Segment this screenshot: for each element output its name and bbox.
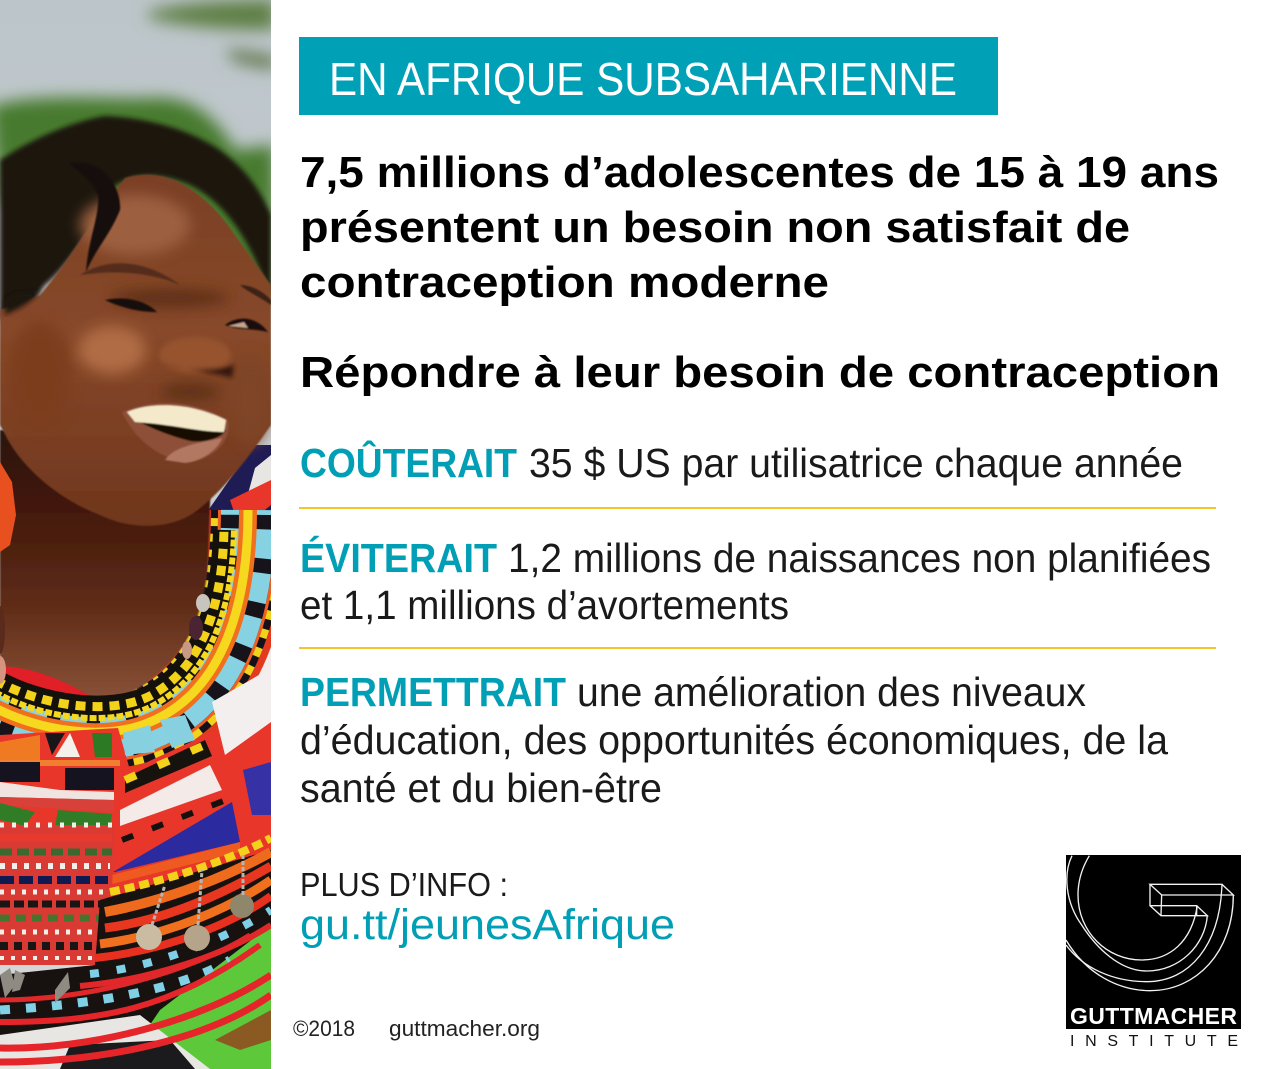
neck xyxy=(0,430,212,701)
text block: benefits: d’éducation, des opportunités économiques, de la xyxy=(300,717,1168,763)
banner: region label xyxy=(299,37,998,115)
red garment xyxy=(6,666,89,696)
more info link: PLUS D’INFO : xyxy=(300,866,508,903)
photo: smiling woman with beaded necklace xyxy=(0,0,275,1069)
subheading: Répondre à leur besoin de contraception xyxy=(300,348,1220,397)
text block: cost: COÛTERAIT xyxy=(300,440,517,486)
face xyxy=(0,175,271,526)
front collar xyxy=(0,668,271,900)
eyes and brows xyxy=(80,263,271,332)
text block: benefits xyxy=(300,669,1168,811)
footer: copyright and site xyxy=(293,1016,540,1041)
nose xyxy=(159,337,234,378)
heading: unmet need statistic: contraception moderne xyxy=(300,258,829,307)
necklace rings xyxy=(0,420,271,732)
left edge beads xyxy=(0,462,16,552)
heading: unmet need statistic: présentent un besoin non satisfait de xyxy=(300,203,1130,252)
text block: births and abortions averted: et 1,1 millions d’avortements xyxy=(300,582,789,628)
footer: copyright and site: ©2018 xyxy=(293,1016,355,1041)
mouth with smile xyxy=(122,403,229,463)
braid xyxy=(70,162,120,272)
more info link: gu.tt/jeunesAfrique xyxy=(300,901,675,949)
logo: Guttmacher Institute: GUTTMACHER xyxy=(1070,1003,1237,1029)
inner beaded collar xyxy=(0,530,234,718)
logo: Guttmacher Institute xyxy=(1066,855,1241,1050)
text block: benefits: une amélioration des niveaux xyxy=(577,669,1086,715)
banner: region label: EN AFRIQUE SUBSAHARIENNE xyxy=(329,53,957,105)
coins xyxy=(0,855,254,1003)
text block: births and abortions averted: ÉVITERAIT xyxy=(300,535,497,581)
text block: benefits: santé et du bien-être xyxy=(300,765,662,811)
text block: benefits: PERMETTRAIT xyxy=(300,669,566,715)
hair xyxy=(0,116,271,320)
earring beads xyxy=(0,594,210,684)
text block: births and abortions averted xyxy=(300,535,1211,628)
heading: unmet need statistic: 7,5 millions d’adolescentes de 15 à 19 ans xyxy=(300,148,1219,197)
text block: cost: 35 $ US par utilisatrice chaque année xyxy=(529,440,1183,486)
logo: Guttmacher Institute: INSTITUTE xyxy=(1070,1033,1238,1050)
lower strands and cloth xyxy=(0,850,271,1035)
footer: copyright and site: guttmacher.org xyxy=(389,1016,540,1041)
heading: unmet need statistic xyxy=(300,148,1219,307)
text block: births and abortions averted: 1,2 millions de naissances non planifiées xyxy=(508,535,1211,581)
more info link xyxy=(300,866,675,949)
